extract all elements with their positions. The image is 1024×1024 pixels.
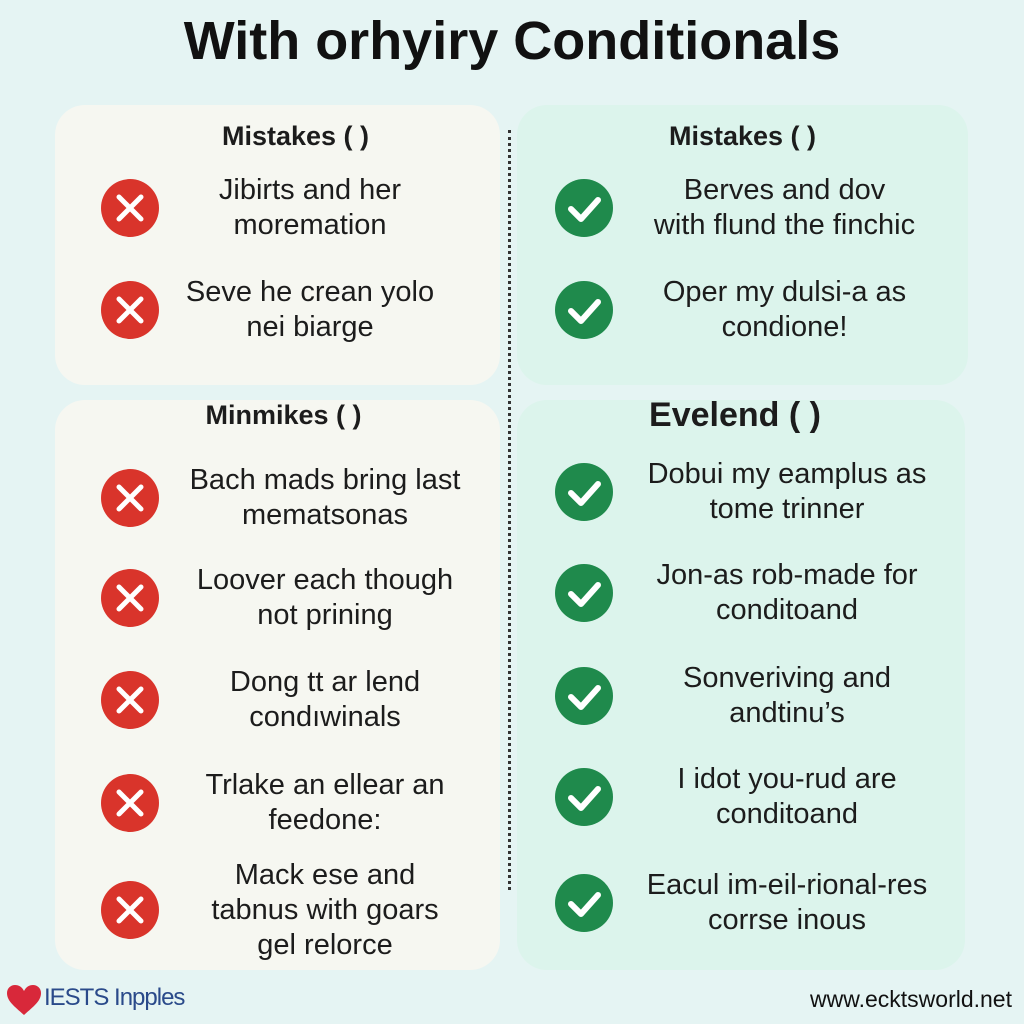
row 1: with flund the finchic <box>654 209 915 241</box>
row 2: Loover each though <box>197 564 453 596</box>
heading: Mistakes ( ) <box>222 121 369 151</box>
row 3 <box>555 662 891 729</box>
row 2: conditoand <box>716 594 858 626</box>
row 2: Oper my dulsi-a as <box>663 276 906 308</box>
row 5: gel relorce <box>257 929 393 961</box>
footer logo: IESTS Inpples <box>44 984 184 1011</box>
row 4 <box>101 769 445 836</box>
panel: bottom right <box>517 400 965 970</box>
row 2 <box>101 564 453 631</box>
row 1 <box>555 174 915 241</box>
row 1: Berves and dov <box>684 174 885 206</box>
row 1 <box>555 458 926 525</box>
row 5: tabnus with goars <box>211 894 439 926</box>
row 5: Eacul im-eil-rional-res <box>647 869 927 901</box>
row 2 <box>555 559 918 626</box>
row 4: Trlake an ellear an <box>205 769 445 801</box>
row 5: corrse inous <box>708 904 866 936</box>
row 5 <box>555 869 927 936</box>
row 3: Sonveriving and <box>683 662 891 694</box>
row 4 <box>555 763 897 830</box>
row 1: Dobui my eamplus as <box>648 458 926 490</box>
row 1: Jibirts and her <box>219 174 401 206</box>
row 2: not prining <box>257 599 393 631</box>
row 5 <box>101 859 439 961</box>
row 3: andtinu’s <box>729 697 845 729</box>
row 3 <box>101 666 420 733</box>
row 2 <box>101 276 434 343</box>
row 1: moremation <box>233 209 387 241</box>
footer url: www.ecktsworld.net <box>810 986 1012 1012</box>
row 2: Jon-as rob-made for <box>656 559 918 591</box>
row 4: conditoand <box>716 798 858 830</box>
row 5: Mack ese and <box>235 859 415 891</box>
row 2: nei biarge <box>246 311 374 343</box>
row 3: condıwinals <box>249 701 401 733</box>
row 1 <box>101 464 460 531</box>
row 1 <box>101 174 401 241</box>
panel: top right <box>517 105 968 385</box>
row 2 <box>555 276 906 343</box>
footer logo <box>7 984 184 1015</box>
row 1: Bach mads bring last <box>190 464 460 496</box>
divider dots <box>508 130 511 890</box>
panel: bottom left <box>55 400 500 970</box>
row 3: Dong tt ar lend <box>230 666 420 698</box>
row 1: tome trinner <box>710 493 864 525</box>
panel: top left mistakes <box>55 105 500 385</box>
row 2: Seve he crean yolo <box>186 276 434 308</box>
row 4: feedone: <box>269 804 381 836</box>
row 4: I idot you-rud are <box>677 763 897 795</box>
heading: Mistakes ( ) <box>669 121 816 151</box>
row 1: mematsonas <box>242 499 408 531</box>
row 2: condione! <box>722 311 847 343</box>
heading: Minmikes ( ) <box>205 400 362 430</box>
icon: heart <box>7 985 41 1015</box>
heading: Evelend ( ) <box>649 396 821 434</box>
title: With orhyiry Conditionals <box>184 11 840 71</box>
